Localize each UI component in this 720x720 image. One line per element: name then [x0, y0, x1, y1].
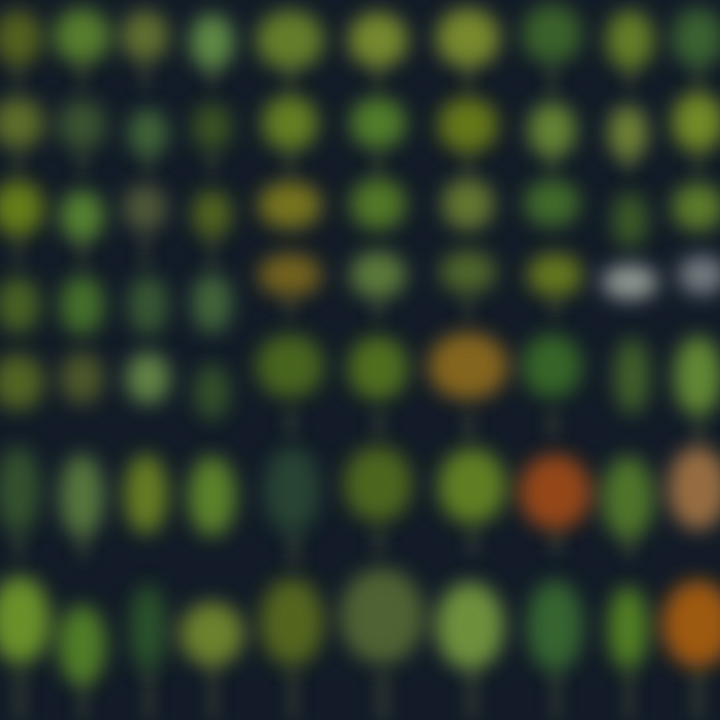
row 2 of trees — [0, 92, 720, 161]
row 7 of trees — [0, 568, 720, 685]
row 6 of trees — [0, 446, 720, 540]
row 4 of trees — [0, 250, 720, 335]
row 3 of trees — [0, 178, 720, 248]
row 1 of trees — [0, 4, 720, 70]
row 5 of trees — [0, 332, 720, 420]
